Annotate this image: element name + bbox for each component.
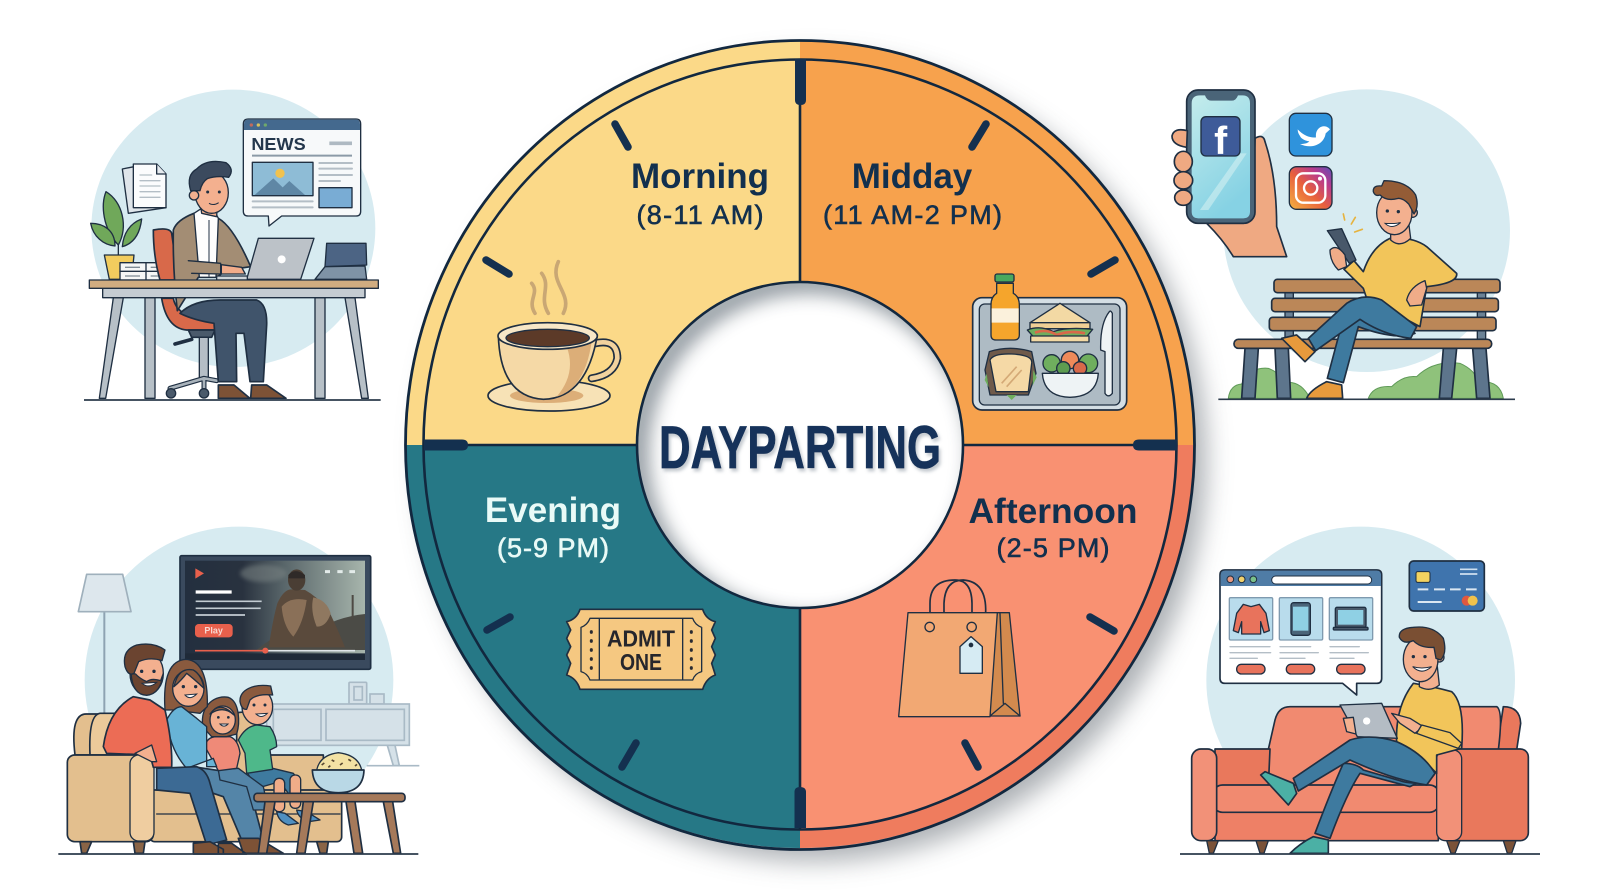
shoe (1307, 382, 1343, 398)
head (1419, 667, 1439, 689)
person with tablet (1261, 627, 1462, 853)
chart: dayparting clock wheel (405, 40, 1195, 850)
background circle (91, 90, 375, 367)
family watching (103, 644, 320, 854)
mom (165, 659, 217, 768)
label: midday: Midday (852, 157, 973, 196)
label: morning: (8-11 AM) (636, 200, 764, 230)
desk (89, 280, 378, 398)
front leg (1293, 737, 1435, 791)
panel: evening family TV scene (58, 527, 419, 854)
label: afternoon: Afternoon (968, 492, 1138, 531)
office chair (153, 229, 245, 398)
jacket (173, 213, 251, 311)
shirt (194, 208, 218, 277)
panel: midday social media scene (1172, 89, 1515, 399)
sleeve (1417, 725, 1462, 748)
front leg (1308, 297, 1417, 351)
segment: evening (406, 445, 800, 848)
icon: admit one ticket: ONE (620, 649, 662, 675)
bushes (1228, 363, 1503, 398)
label: afternoon (968, 492, 1138, 563)
floor line (1180, 851, 1540, 856)
icon: facebook (1201, 117, 1240, 163)
credit card (1409, 561, 1484, 611)
icon: potted plant (91, 192, 142, 279)
tablet (1340, 703, 1397, 738)
center hole (637, 282, 981, 626)
icon: documents (122, 164, 166, 213)
sweater (1344, 238, 1457, 327)
product browser card (1220, 570, 1382, 695)
icon: shopping bag (899, 580, 1020, 717)
sandwich (1027, 303, 1093, 342)
sofa (1192, 707, 1528, 853)
icon: stack of books (120, 263, 170, 280)
label: afternoon: (2-5 PM) (996, 533, 1110, 563)
Play button (195, 624, 233, 637)
floor lamp (78, 574, 131, 713)
hand (221, 265, 245, 274)
icon: twitter (1289, 113, 1332, 156)
label: evening: (5-9 PM) (497, 533, 609, 563)
sweater (1397, 683, 1462, 773)
icon: admit one ticket (567, 609, 715, 689)
shoe (1282, 335, 1315, 362)
segment: afternoon (800, 445, 1194, 848)
floor line (1218, 397, 1515, 402)
TV: Play (204, 626, 223, 636)
label: morning (631, 157, 769, 230)
movie still (240, 565, 365, 650)
toast (985, 348, 1037, 400)
quadrant dividers (424, 59, 1177, 829)
salad bowl (1042, 351, 1098, 397)
tablet (315, 243, 367, 279)
panel: morning news desk scene (84, 90, 381, 400)
knife (1101, 311, 1112, 396)
background circle (85, 527, 393, 833)
title: DAYPARTING (659, 414, 941, 481)
shoes (1261, 772, 1297, 805)
TV (180, 556, 371, 669)
girl (202, 697, 268, 810)
segment: midday (800, 42, 1194, 445)
label: morning: Morning (631, 157, 769, 196)
back leg (1315, 763, 1435, 838)
icon: lunch tray (973, 274, 1127, 410)
background circle (1223, 89, 1510, 372)
label: midday (823, 157, 1002, 230)
popcorn bowl (312, 753, 364, 793)
segment: morning (406, 42, 800, 445)
icon: jacket (1233, 604, 1269, 634)
laptop (217, 238, 314, 280)
inner ring (424, 60, 1176, 830)
heading: NEWS: NEWS (251, 134, 306, 154)
icon: phone (1291, 603, 1310, 635)
hands (1343, 717, 1356, 734)
icon: instagram (1289, 167, 1332, 209)
shoes (218, 385, 286, 398)
phone (1327, 229, 1356, 263)
boy (238, 685, 301, 812)
panel: afternoon online shopping scene (1180, 527, 1540, 854)
minor ticks (486, 124, 1115, 767)
icon: hand holding phone (1172, 90, 1287, 257)
couch (67, 712, 342, 853)
label: evening: Evening (485, 491, 621, 530)
floor line (58, 851, 418, 856)
coffee table (254, 793, 405, 853)
hand (1407, 281, 1427, 306)
background circle (1206, 527, 1515, 833)
juice bottle (991, 274, 1019, 340)
back leg (1327, 318, 1415, 383)
icon: laptop (1335, 607, 1366, 627)
dad (103, 644, 227, 845)
major ticks (424, 59, 1177, 828)
mom jeans (193, 767, 263, 840)
park bench (1234, 279, 1500, 398)
icon: facebook: f (1214, 119, 1228, 163)
head (1391, 220, 1411, 244)
person using phone (1282, 181, 1457, 398)
outer rim (406, 40, 1194, 850)
ticket text: ADMIT (607, 626, 675, 652)
trousers (180, 300, 267, 382)
wheel drop shadow (422, 57, 1206, 861)
person with laptop (173, 161, 286, 398)
label: evening (485, 491, 621, 563)
news card (243, 119, 361, 226)
sleeve (188, 261, 221, 274)
shoes (193, 838, 283, 854)
icon: coffee cup (488, 262, 617, 411)
label: midday: (11 AM-2 PM) (823, 200, 1002, 230)
TV stand (267, 682, 419, 766)
floor line (84, 397, 381, 402)
head (200, 202, 217, 217)
